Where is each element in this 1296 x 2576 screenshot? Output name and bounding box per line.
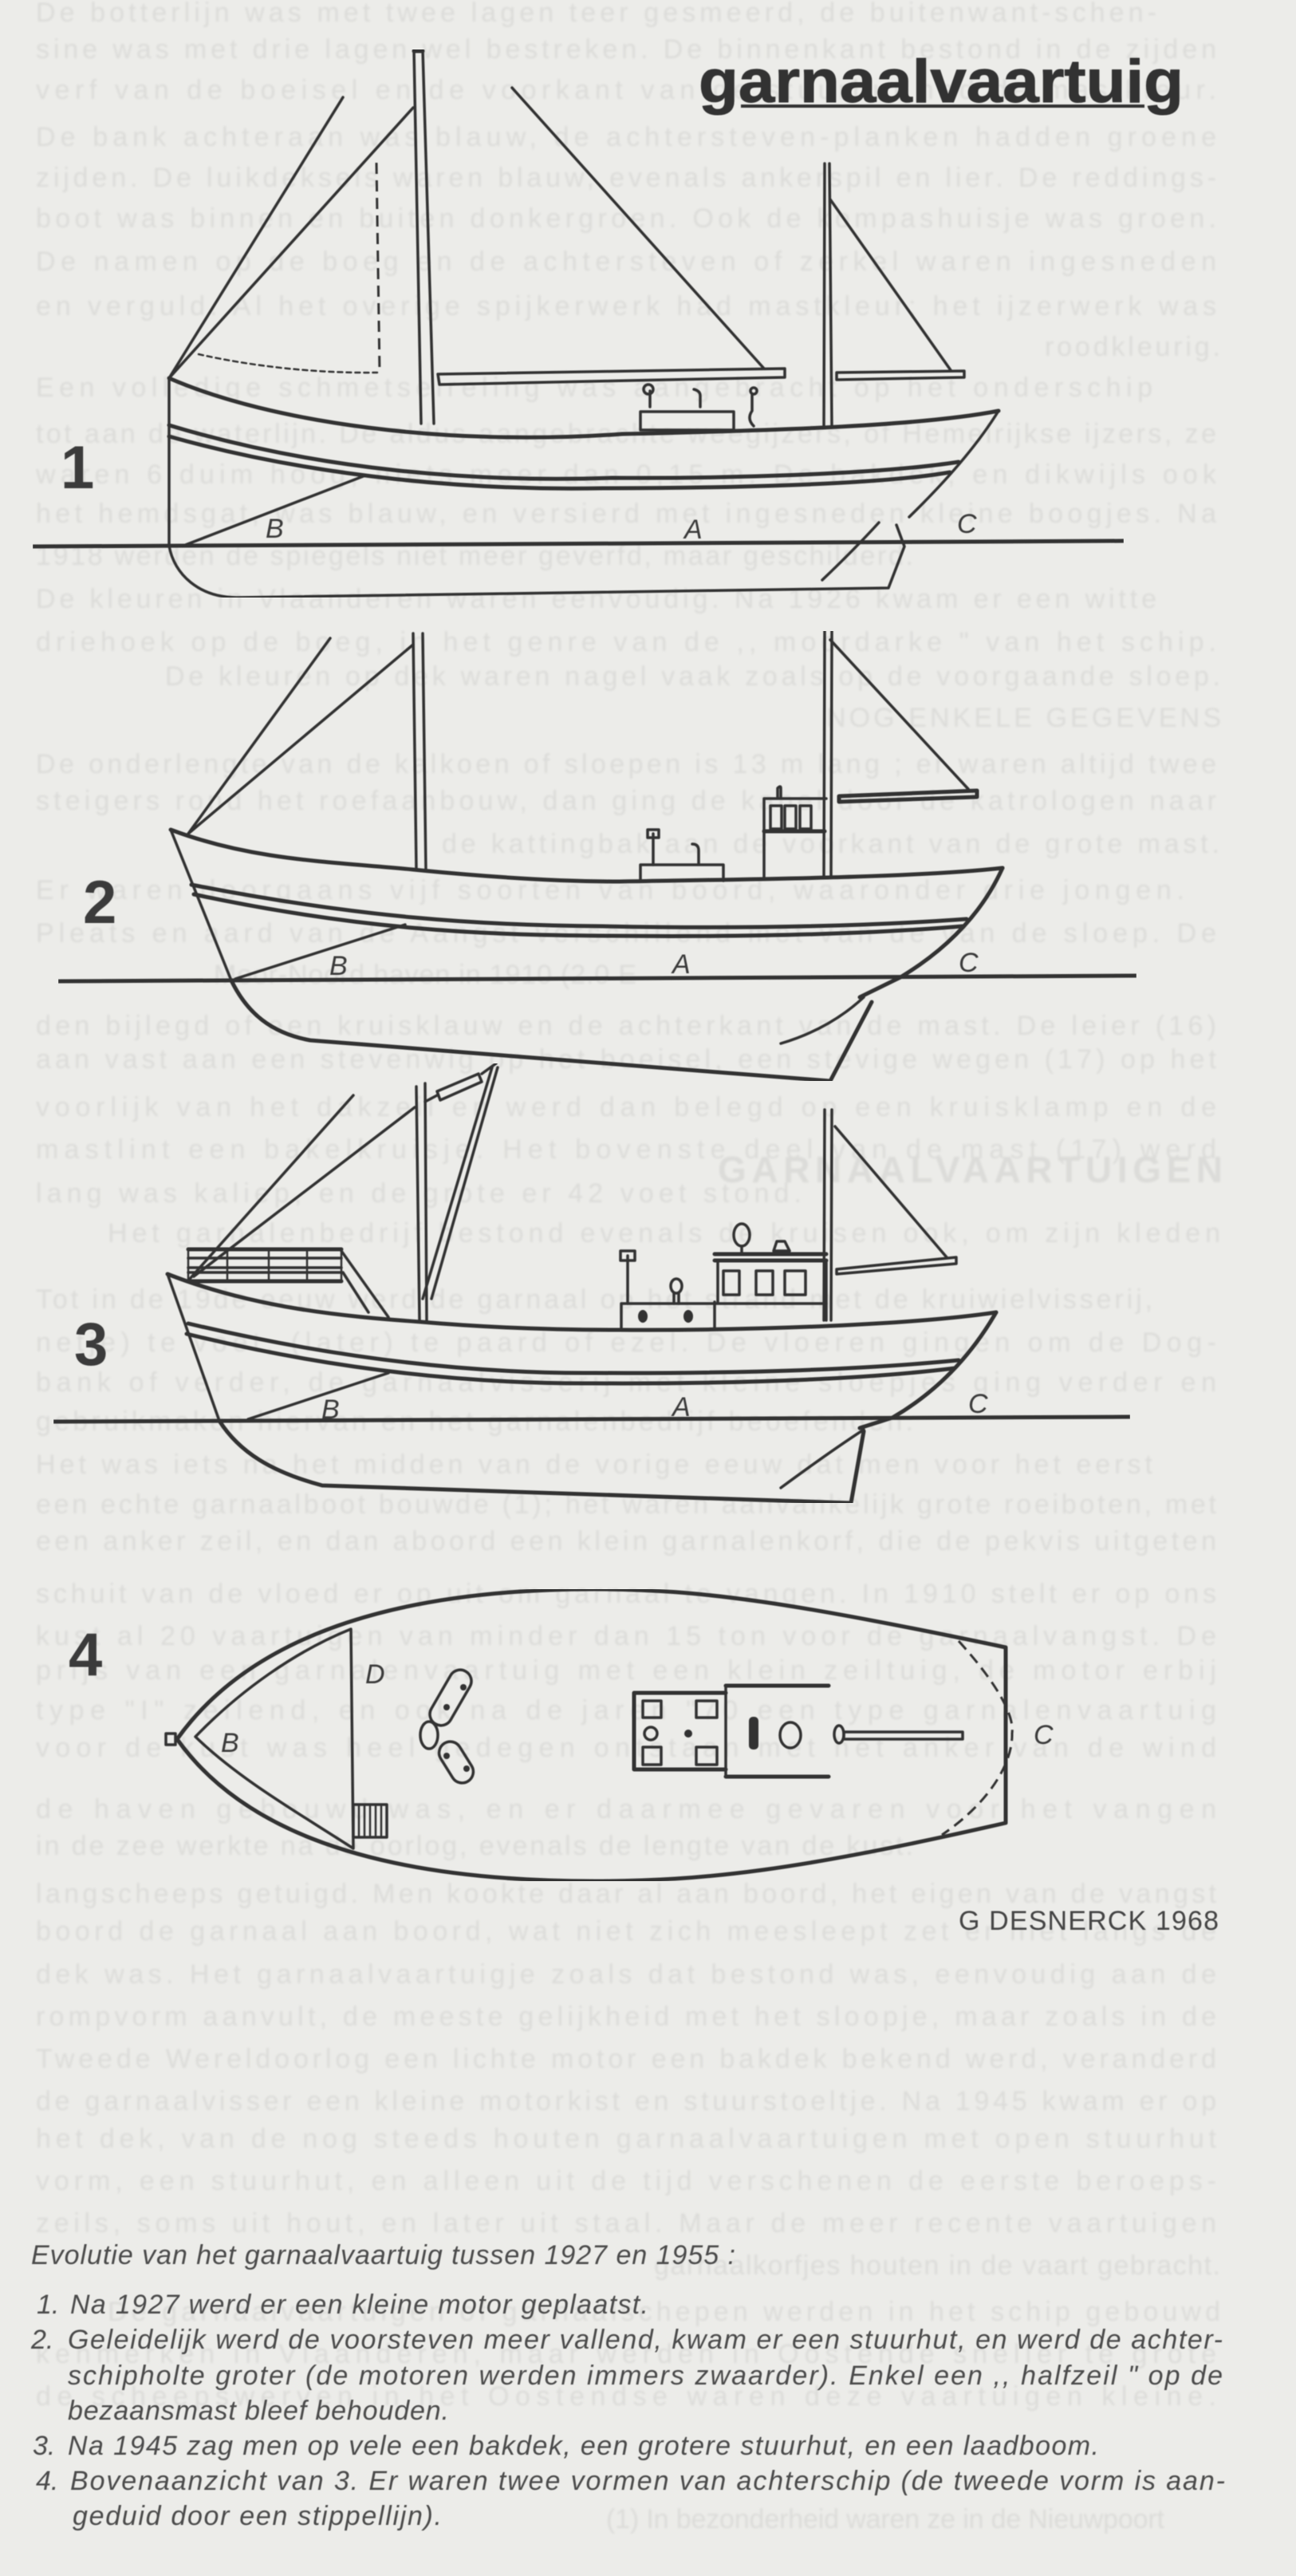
bleed-through text from the reverse page: sine was met drie lagen wel bestreken. De binnenkant bestond in de zijden [36, 34, 1216, 65]
caption: evolution of the shrimp vessel [30, 2240, 1225, 2531]
bleed-through text from the reverse page: en verguld. Al het overige spijkerwerk had mastkleur; het ijzerwerk was [36, 291, 1216, 322]
item 1: 1. [37, 2290, 59, 2320]
plan part labels: C [1034, 1720, 1054, 1750]
bleed-through text from the reverse page: mastlint een bakelkruisje. Het bovenste deel van de mast (17) werd [36, 1134, 1216, 1165]
bleed-through text from the reverse page: Pleats en aard van de Aangst verschillend met van de van de sloep. De [36, 918, 1216, 949]
bollards and hatch [420, 1666, 478, 1787]
item 1: Na 1927 werd er een kleine motor geplaatst. [70, 2290, 648, 2320]
drawing: ship 1, side view 1927 [33, 49, 1124, 598]
bleed-through text from the reverse page: Er waren doorgaans vijf soorten van boord, waaronder drie jongen. [36, 875, 1184, 905]
bleed-through text from the reverse page: voor de kust was heel gedegen ontstaan met het anker van de wind [36, 1733, 1216, 1763]
caption intro: Evolutie van het garnaalvaartuig tussen 1927 en 1955 : [31, 2240, 735, 2270]
plan part labels [221, 1659, 1054, 1758]
waterline [58, 976, 1136, 981]
bleed-through text from the reverse page: schuit van de vloed er op uit om garnaal te vangen. In 1910 stelt er op ons [36, 1579, 1216, 1609]
item 2: 2. [30, 2325, 53, 2355]
bleed-through text from the reverse page: de kattingbak aan de voorkant van de grote mast. [442, 829, 1219, 859]
bleed-through text from the reverse page: het hemdsgat, was blauw, en versierd met ingesneden kleine boogjes. Na [36, 499, 1216, 529]
item 4: Bovenaanzicht van 3. Er waren twee vormen van achterschip (de tweede vorm is aan- [70, 2466, 1225, 2496]
bleed-through text from the reverse page: GARNAALVAARTUIGEN [718, 1149, 1223, 1190]
item 4: 4. [36, 2466, 58, 2496]
bleed-through text from the reverse page: Tot in de 19de eeuw werd de garnaal op het strand met de kruiwielvisserij, [36, 1284, 1152, 1315]
wheelhouse with radar [715, 1224, 826, 1320]
hull part labels: C [959, 948, 979, 978]
item 2: Geleidelijk werd de voorsteven meer vallend, kwam er een stuurhut, en werd de achter- [68, 2325, 1223, 2355]
bleed-through text from the reverse page: NOG ENKELE GEGEVENS [826, 703, 1221, 733]
item 2: bezaansmast bleef behouden. [68, 2396, 449, 2426]
waterline [33, 541, 1124, 546]
deckhouse with portholes and fittings [620, 1251, 826, 1328]
bleed-through text from the reverse page: De kleuren op dek waren nagel vaak zoals op de voorgaande sloep. [165, 661, 1220, 692]
drawing: ship 4, plan view [69, 1589, 1054, 1881]
bleed-through text from the reverse page: de scheepswerven in het Oostendse waren deze vaartuigen kleine. [36, 2381, 1216, 2412]
number 1: 1 [61, 434, 94, 502]
item 3: Na 1945 zag men op vele een bakdek, een grotere stuurhut, en een laadboom. [68, 2431, 1099, 2461]
hull part labels: A [671, 1392, 691, 1422]
hull part labels: C [957, 509, 977, 539]
bleed-through text from the reverse page: De onderlengte van de kalkoen of sloepen is 13 m lang ; er waren altijd twee [36, 749, 1216, 779]
hull part labels: A [683, 515, 703, 545]
item 2: schipholte groter (de motoren werden immers zwaarder). Enkel een ,, halfzeil " op de [68, 2361, 1223, 2391]
plan part labels: D [365, 1659, 385, 1690]
hull part labels: A [671, 949, 691, 980]
bleed-through text from the reverse page: Een volledige schmetselreling was aangebracht op het onderschip [36, 373, 1152, 403]
bleed-through text from the reverse page: De bank achteraan was blauw, de achtersteven-planken hadden groene [36, 122, 1216, 152]
number 4: 4 [69, 1621, 102, 1689]
plan part labels: B [221, 1728, 239, 1758]
number 2: 2 [83, 869, 116, 937]
mizzen mast with sail [824, 1110, 956, 1320]
forecastle railing [188, 1249, 388, 1317]
bleed-through text from the reverse page: De namen op de boeg en de achtersteven of zerkel waren ingesneden [36, 247, 1216, 277]
main mast with stays [188, 633, 426, 871]
bleed-through text from the reverse page: De kleuren in Vlaanderen waren eenvoudig. Na 1926 kwam er een witte [36, 584, 1156, 614]
item 3: 3. [33, 2431, 55, 2461]
deckhouse plan [634, 1686, 829, 1777]
bleed-through text from the reverse page: de garnaalvisser een kleine motorkist en stuurstoeltje. Na 1945 kwam er op [36, 2086, 1216, 2116]
mizzen mast with sail [824, 164, 964, 428]
bleed-through text from the reverse page: dek was. Het garnaalvaartuigje zoals dat bestond was, eenvoudig aan de [36, 1959, 1216, 1990]
deckhouse and fittings [640, 385, 757, 430]
hull outline [166, 1589, 1006, 1881]
bleed-through text from the reverse page: steigers rond het roefaanbouw, dan ging de kabel door de katrologen naar [36, 786, 1216, 816]
deckhouse and fittings [640, 830, 723, 881]
bleed-through text from the reverse page: driehoek op de boeg, in het genre van de ,, moordarke " van het schip. [36, 627, 1216, 657]
bleed-through text from the reverse page: langscheeps getuigd. Men kookte daar al aan boord, het eigen van de vangst [36, 1879, 1217, 1909]
hull part labels: B [321, 1395, 340, 1425]
bleed-through text from the reverse page: de haven gebouwd was, en er daarmee gevaren voor het vangen [36, 1794, 1216, 1825]
bleed-through text from the reverse page: verf van de boeisel en de voorkant van de stuurhut had de mastkleur. [36, 75, 1216, 105]
bleed-through text from the reverse page: Het garnalenbedrijf bestond evenals de kruisen ook, om zijn kleden [108, 1218, 1220, 1249]
item 4 [36, 2466, 1225, 2531]
bleed-through text from the reverse page: het dek, van de nog steeds houten garnaalvaartuigen met open stuurhut [36, 2124, 1217, 2154]
bleed-through text from the reverse page: in de zee werkte na de oorlog, evenals de lengte van de kust. [36, 1831, 913, 1861]
main mast with rigging [169, 49, 785, 424]
bleed-through text from the reverse page: bank of verder, de garnaalvisserij met kleine sloepjes ging verder en [36, 1367, 1216, 1398]
hull part labels [266, 509, 977, 545]
hull part labels [329, 948, 979, 981]
bleed-through text from the reverse page: voorlijk van het dakzeil en werd dan belegd op een kruisklamp en de [36, 1092, 1216, 1122]
hull [169, 378, 999, 598]
bleed-through text from the reverse page: rompvorm aanvult, de meeste gelijkheid met het sloopje, maar zoals in de [36, 2002, 1216, 2032]
bleed-through text from the reverse page: tot aan de waterlijn. De aldus aangebrachte weegijzers, of Hemelrijkse ijzers, ze [36, 419, 1216, 449]
number 3: 3 [74, 1311, 108, 1379]
winch block [353, 1805, 387, 1837]
waterline [53, 1417, 1130, 1422]
bleed-through text from the reverse page: (1) In bezonderheid waren ze in de Nieuwpoort [606, 2504, 1165, 2535]
bleed-through text from the reverse page: prijs van een garnalenvaartuig met een klein zeiltuig, de motor erbij [36, 1655, 1216, 1686]
bleed-through text from the reverse page: kust al 20 vaartuigen van minder dan 15 ton voor de garnaalvangst. De [36, 1621, 1216, 1651]
signature: G DESNERCK 1968 [959, 1906, 1219, 1936]
hull part labels: B [329, 951, 348, 981]
bleed-through text from the reverse page: De garnaalvaartuigen of garnaalschepen werden in het schip gebouwd [108, 2297, 1220, 2327]
bleed-through text from the reverse page: kenmerken in Vlaanderen, maar werden in Oostende sneller te grote [36, 2339, 1216, 2369]
bleed-through text from the reverse page: zeils, soms uit hout, en later uit staal. Maar de meer recente vaartuigen [36, 2208, 1216, 2239]
bleed-through text from the reverse page: Het was iets na het midden van de vorige eeuw dat men voor het eerst [36, 1450, 1153, 1480]
bleed-through text from the reverse page: zijden. De luikdeksels waren blauw, evenals ankerspil en lier. De reddings- [36, 163, 1216, 193]
bleed-through text from the reverse page: garnaalkorfjes houten in de vaart gebracht. [654, 2251, 1220, 2281]
boom in plan view [834, 1726, 963, 1743]
bleed-through text from the reverse page: waren 6 duim hoog, niets meer dan 0,15 m. De bakdek, en dikwijls ook [35, 460, 1217, 490]
item 4: geduid door een stippellijn). [73, 2501, 442, 2531]
hull part labels [321, 1389, 988, 1425]
drawing: ship 2, side view [58, 631, 1136, 1081]
bleed-through text from the reverse page: type "I" zeilend, en ook na de jaren "70 een type garnalenvaartuig [36, 1695, 1216, 1726]
heading: garnaalvaartuig: garnaalvaartuig [699, 48, 1184, 116]
hull part labels: B [266, 514, 284, 544]
bleed-through text from the reverse page: netje) te voet, (later) te paard of ezel. De vloeren gingen om de Dog- [36, 1327, 1216, 1358]
main mast, derrick and stays [190, 1063, 498, 1322]
hull part labels: C [968, 1389, 988, 1419]
hull [167, 1274, 996, 1503]
bleed-through text from the reverse page: den bijlegd of een kruisklauw en de achterkant van de mast. De leier (16) [36, 1011, 1216, 1041]
item 2 [30, 2325, 1223, 2426]
wheelhouse [764, 787, 826, 878]
bleed-through text from the reverse page: aan vast aan een stevenwig op het boeisel, een stevige wegen (17) op het [36, 1044, 1217, 1075]
bleed-through text from the reverse page: gebruikmaken hiervan en het garnalenbedrijf beoefenden. [36, 1406, 913, 1437]
drawing: ship 3, side view after 1945 [53, 1063, 1130, 1503]
alternate stern, dashed [942, 1641, 1012, 1835]
bleed-through text from the reverse page: Tweede Wereldoorlog een lichte motor een bakdek bekend werd, veranderd [36, 2044, 1216, 2074]
bleed-through text from the reverse page: boord de garnaal aan boord, wat niet zich meesleept zet er niet langs de [36, 1916, 1216, 1947]
bleed-through text from the reverse page: een echte garnaalboot bouwde (1); het waren aanvankelijk grote roeiboten, met [36, 1489, 1217, 1520]
bleed-through text from the reverse page: roodkleurig. [1045, 332, 1220, 362]
bleed-through text from the reverse page: 1918 werden de spiegels niet meer geverfd, maar geschilderd. [36, 541, 913, 571]
bleed-through text from the reverse page: Moor-Noord haven in 1910 (2.0 E [214, 960, 636, 990]
mizzen mast with sail [824, 631, 977, 877]
bleed-through text from the reverse page: lang was kaliep, en de grote er 42 voet stond. [36, 1178, 802, 1209]
bleed-through text from the reverse page: boot was binnen en buiten donkergroen. Ook de kompashuisje was groen. [36, 203, 1216, 234]
hull [171, 830, 1003, 1081]
bleed-through text from the reverse page: een anker zeil, en dan aboord een klein garnalenkorf, die de pekvis uitgeten [36, 1526, 1216, 1556]
bleed-through text from the reverse page: vorm, een stuurhut, en alleen uit de tijd verschenen de eerste beroeps- [36, 2166, 1216, 2196]
